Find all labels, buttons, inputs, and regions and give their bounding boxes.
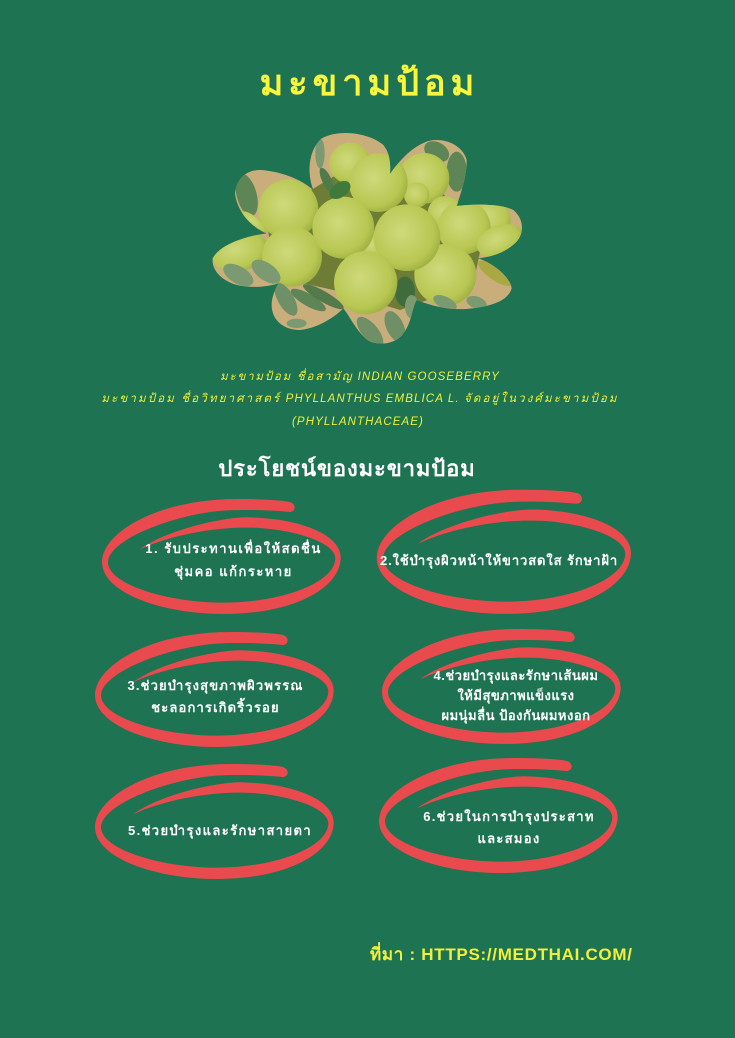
benefit 2: 2.ใช้บำรุงผิวหน้าให้ขาวสดใส รักษาฝ้า (380, 553, 618, 568)
benefit 6 (423, 809, 595, 846)
benefit 3 (127, 678, 304, 715)
benefit 3: 3.ช่วยบำรุงสุขภาพผิวพรรณ (127, 678, 304, 693)
description text: มะขามป้อม ชื่อวิทยาศาสตร์ PHYLLANTHUS EMBLICA L. จัดอยู่ในวงศ์มะขามป้อม (101, 393, 619, 405)
dark fill behind fruit cluster (267, 177, 483, 310)
fruits (208, 143, 528, 314)
ellipse 5 (95, 764, 334, 879)
heading: benefits: ประโยชน์ของมะขามป้อม (218, 456, 476, 481)
ellipse 4 (382, 629, 621, 744)
benefit 6: 6.ช่วยในการบำรุงประสาท (423, 809, 595, 824)
benefit 5: 5.ช่วยบำรุงและรักษาสายตา (128, 823, 312, 838)
benefit 4: ผมนุ่มลื่น ป้องกันผมหงอก (441, 708, 591, 723)
ellipse 3 (95, 632, 334, 747)
benefit 4: ให้มีสุขภาพแข็งแรง (457, 688, 575, 703)
ellipse 1 (102, 499, 341, 614)
tan background (212, 133, 522, 344)
benefit 4 (434, 668, 598, 724)
title: มะขามป้อม (260, 62, 479, 103)
benefit 6: และสมอง (477, 831, 541, 846)
benefit 4: 4.ช่วยบำรุงและรักษาเส้นผม (434, 668, 598, 683)
front leaves (220, 177, 489, 351)
description text: มะขามป้อม ชื่อสามัญ INDIAN GOOSEBERRY (220, 371, 500, 383)
photo: Indian gooseberries in flower-shaped mask (212, 133, 522, 344)
ellipse 6 (379, 758, 618, 873)
benefit 1: ชุ่มคอ แก้กระหาย (174, 564, 293, 579)
ellipse 2 (377, 490, 631, 614)
description text: (PHYLLANTHACEAE) (292, 416, 424, 428)
source: ที่มา : HTTPS://MEDTHAI.COM/ (370, 945, 633, 964)
rear leaves (231, 137, 515, 328)
benefit 1 (145, 539, 322, 580)
benefit 1: 1. รับประทานเพื่อให้สดชื่น (145, 541, 322, 556)
description text (101, 368, 619, 428)
benefit 3: ชะลอการเกิดริ้วรอย (151, 700, 280, 715)
